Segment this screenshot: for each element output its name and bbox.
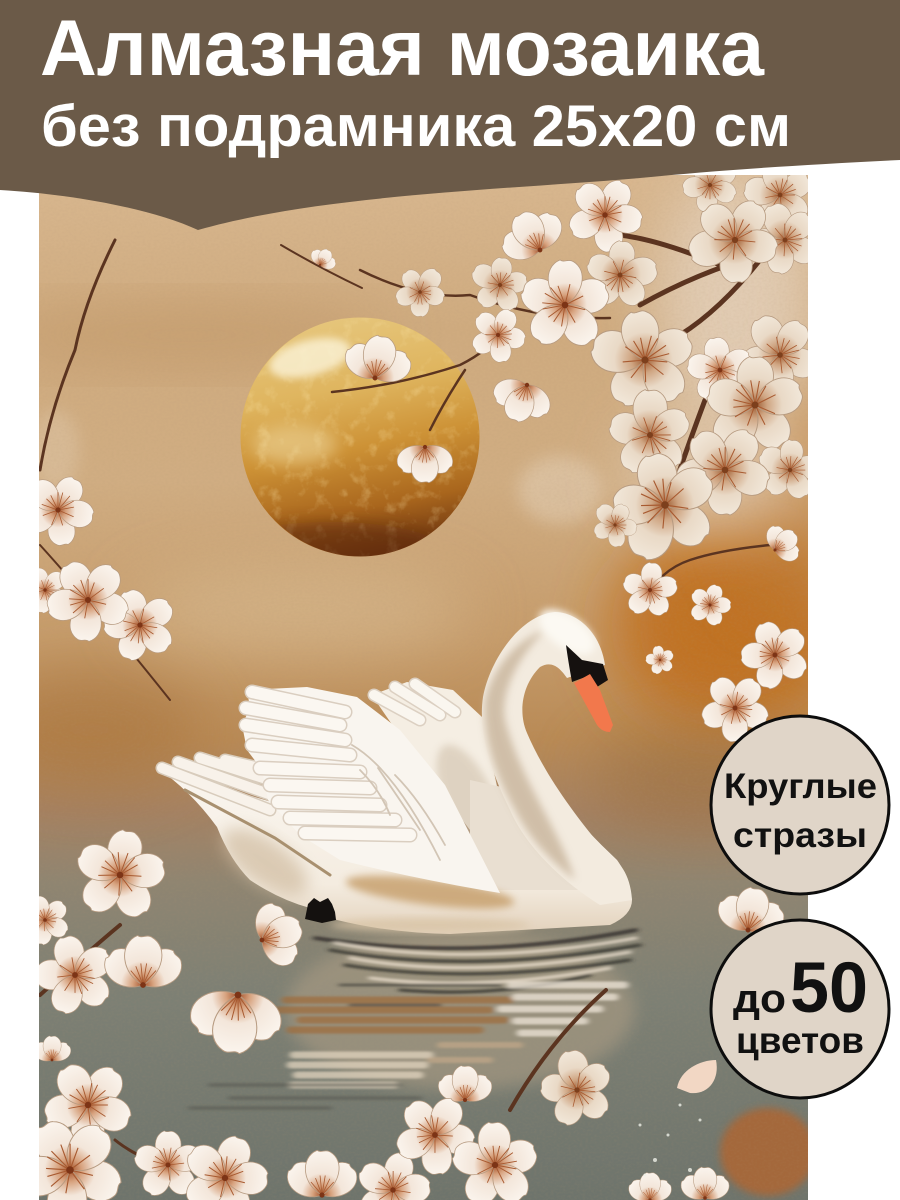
swan body — [157, 768, 632, 934]
badge: round rhinestones — [711, 716, 889, 894]
branches — [40, 235, 805, 1165]
header banner — [0, 0, 900, 230]
swan front wing — [242, 687, 500, 893]
blossoms: left branch — [39, 476, 173, 661]
badge: up to 50 colours — [711, 920, 889, 1098]
blossoms: bottom left — [39, 830, 302, 1200]
swan face mask — [566, 645, 608, 687]
moon — [240, 318, 480, 556]
badge: up to 50 colours: до — [733, 977, 786, 1021]
swan beak — [574, 674, 613, 732]
swan neck and head — [482, 601, 632, 905]
badge: up to 50 colours: цветов — [736, 1020, 864, 1061]
swan — [157, 601, 632, 934]
badge: round rhinestones: Круглые — [724, 767, 877, 806]
blossoms: top right cluster — [311, 175, 808, 742]
swan back wing — [368, 678, 497, 834]
water reflection of the swan — [190, 930, 640, 1108]
blossoms on the moon — [345, 334, 453, 483]
painting: swan on a lake — [39, 175, 808, 1200]
badge: up to 50 colours: 50 — [790, 949, 868, 1028]
badge: round rhinestones: стразы — [733, 816, 867, 855]
swan tail feathers — [162, 758, 330, 875]
subtitle: без подрамника 25х20 см — [41, 94, 791, 159]
swan foot — [305, 898, 336, 923]
blossoms: bottom centre and right — [281, 881, 794, 1200]
title: Алмазная мозаика — [40, 3, 765, 92]
